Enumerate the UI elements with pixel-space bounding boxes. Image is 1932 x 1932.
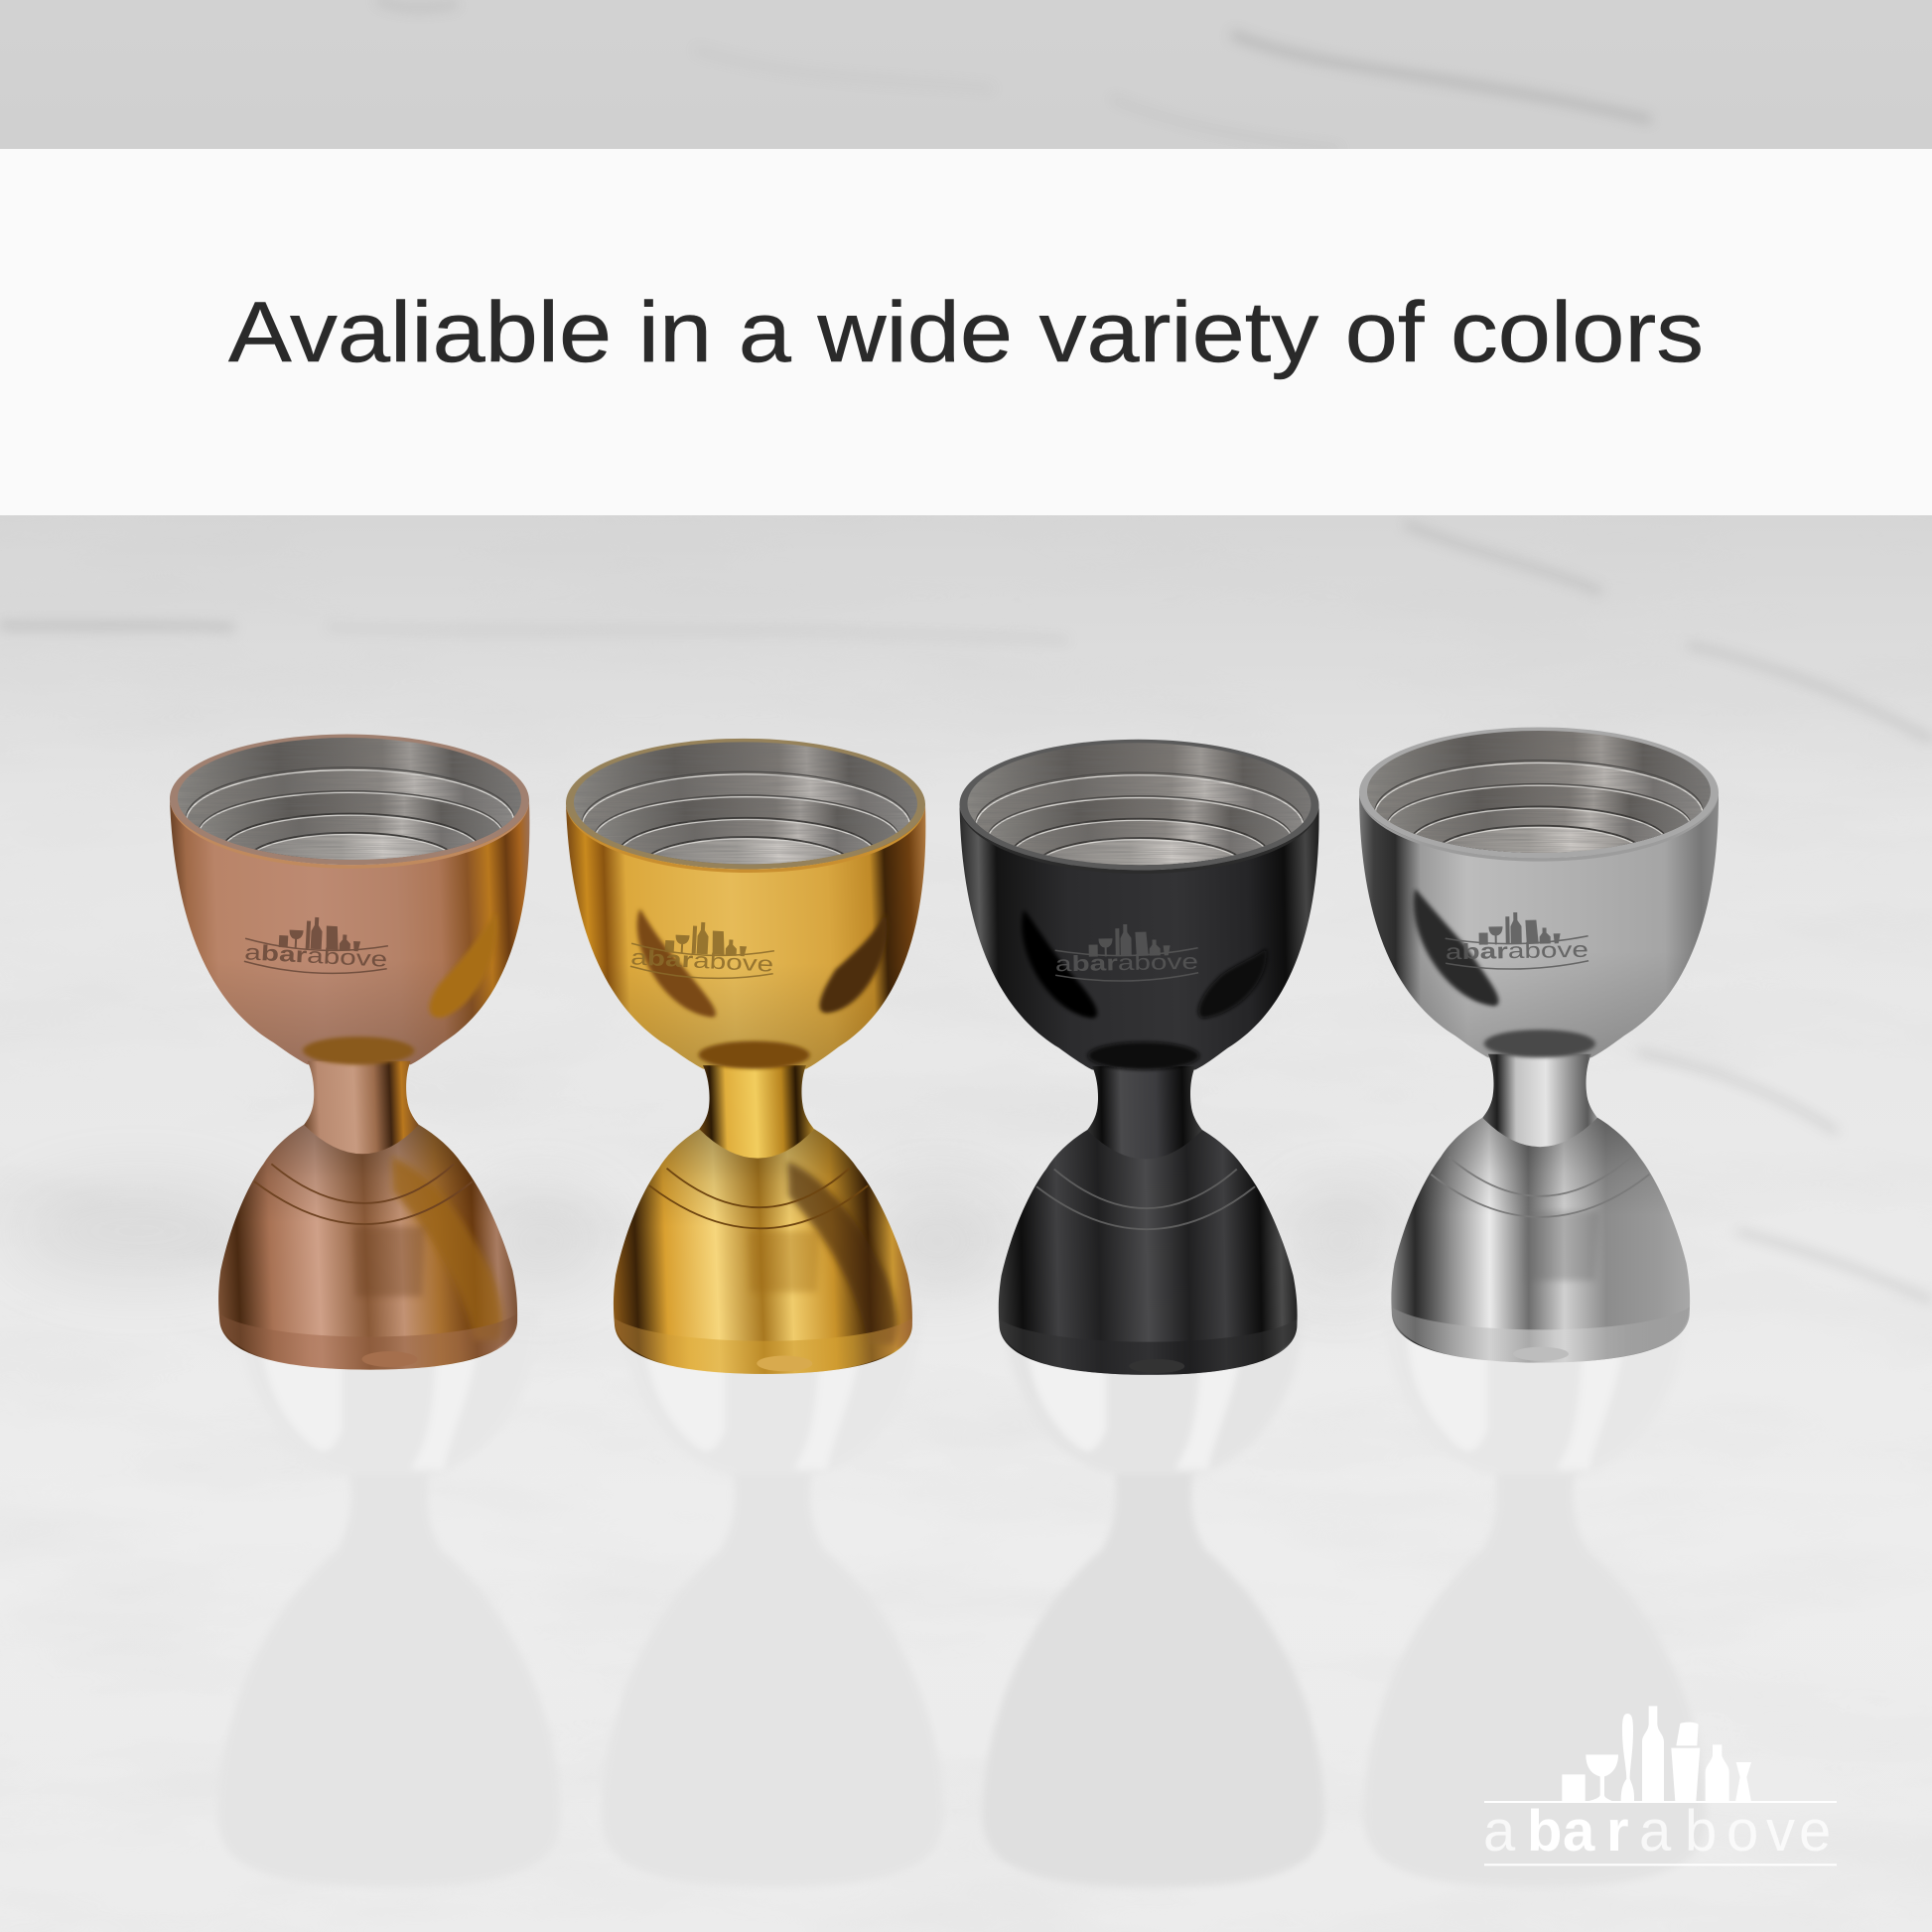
reflection on bowl (426, 913, 500, 1018)
base highlight (1525, 1211, 1600, 1281)
base highlight (749, 1231, 822, 1292)
top marble strip (0, 0, 1932, 149)
base reflection streak (787, 1162, 898, 1344)
brand logo: a bar above (1483, 1706, 1837, 1865)
engraved logo: gold (629, 918, 775, 982)
engraved logo: gold: abar above (630, 944, 774, 977)
jigger: gold (564, 739, 945, 1374)
engraved logo: silver: abar above (1446, 937, 1588, 964)
reflections on bowl (636, 908, 716, 1018)
base highlight (353, 1227, 427, 1297)
engraved logo: copper: abar above (244, 939, 388, 972)
engraved logo: black: abar above (1055, 949, 1198, 976)
reflection on bowl (1414, 889, 1499, 1006)
logo icon: bar tools (1484, 1706, 1837, 1865)
engraved logo: copper (243, 913, 389, 977)
reflection: gold (602, 1311, 943, 1887)
base reflection streak (392, 1157, 503, 1340)
logo wordmark: abarabove (1483, 1799, 1831, 1863)
engraved logo: silver (1445, 911, 1588, 970)
title: Avaliable in a wide variety of colors (228, 285, 1704, 380)
soft cast shadows (10, 1181, 1400, 1291)
title banner (0, 149, 1932, 515)
reflection: silver (1364, 1311, 1706, 1887)
reflection: copper (218, 1311, 560, 1887)
reflection: black (983, 1311, 1324, 1887)
jigger: copper (168, 735, 550, 1370)
jigger: silver (1359, 727, 1721, 1363)
engraved logo: black (1054, 923, 1198, 982)
jigger: black (958, 740, 1328, 1375)
reflections on bowl (1022, 909, 1097, 1019)
reflections on marble (218, 1311, 1706, 1887)
